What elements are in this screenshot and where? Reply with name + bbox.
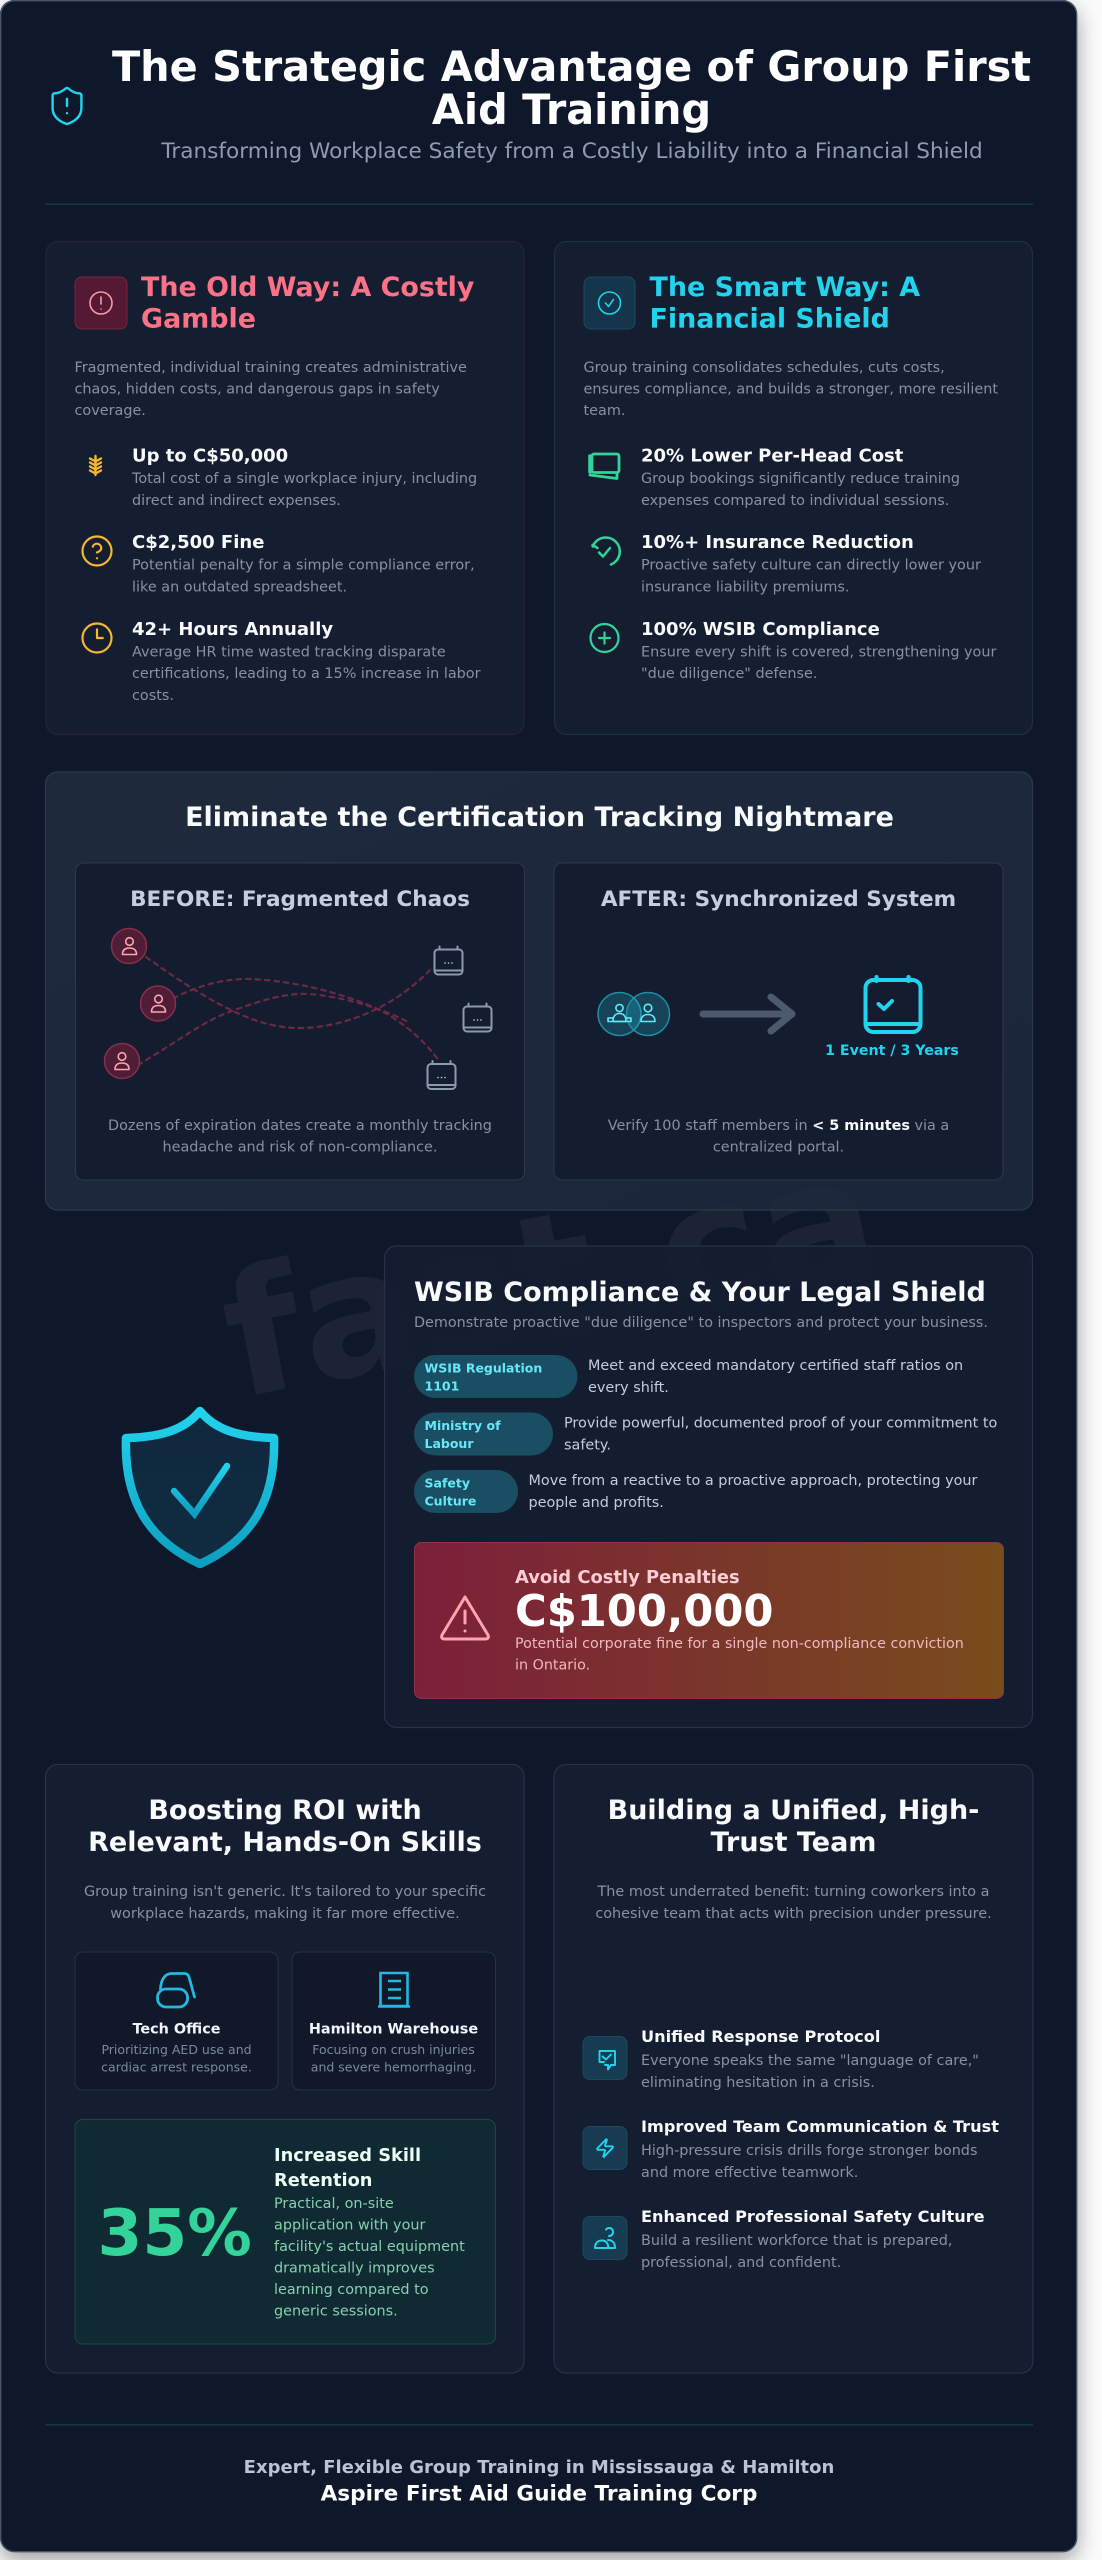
panel: the smart way bbox=[554, 242, 1032, 734]
row: regulation: 1101 bbox=[424, 1378, 459, 1394]
item: WSIB compliance: "due diligence" defense. bbox=[641, 666, 817, 682]
heading bbox=[88, 1795, 482, 1858]
caption: Dozens of expiration dates create a monthly tracking bbox=[108, 1118, 492, 1134]
icon: question bbox=[82, 536, 112, 566]
panel: boosting ROI bbox=[46, 1764, 524, 2373]
item: WSIB compliance bbox=[590, 619, 996, 682]
item: response protocol: Unified Response Protocol bbox=[641, 2027, 880, 2046]
item: hours: certifications, leading to a 15% increase in labor bbox=[132, 666, 481, 682]
synchronized diagram bbox=[598, 977, 959, 1059]
stat title: Increased Skill bbox=[274, 2145, 421, 2166]
card: tech office bbox=[75, 1952, 278, 2090]
row: safety culture bbox=[414, 1470, 978, 1513]
row: safety culture: Culture bbox=[424, 1494, 476, 1508]
row: ministry bbox=[414, 1412, 997, 1456]
item: safety culture: Enhanced Professional Safety Culture bbox=[641, 2207, 985, 2226]
title: Aid Training bbox=[432, 86, 711, 134]
card: hamilton warehouse: and severe hemorrhaging. bbox=[311, 2060, 476, 2074]
big number: 35% bbox=[98, 2196, 252, 2271]
icon: people bbox=[583, 2216, 627, 2260]
item: hours bbox=[82, 619, 481, 704]
heading: Gamble bbox=[141, 304, 256, 334]
card: hamilton warehouse: Focusing on crush injuries bbox=[312, 2042, 475, 2057]
panel: certification tracking bbox=[46, 772, 1032, 1210]
item: WSIB compliance: 100% WSIB Compliance bbox=[641, 619, 880, 640]
group of people bbox=[598, 992, 670, 1036]
heading: Financial Shield bbox=[650, 304, 890, 334]
row: ministry: Labour bbox=[424, 1436, 474, 1451]
row: regulation: Meet and exceed mandatory certified staff ratios on bbox=[588, 1358, 963, 1374]
item: team communication: Improved Team Communication & Trust bbox=[641, 2117, 999, 2136]
intro text bbox=[74, 360, 467, 419]
item: fine bbox=[82, 532, 475, 596]
footer: Aspire First Aid Guide Training Corp bbox=[321, 2482, 757, 2506]
caption: centralized portal. bbox=[713, 1140, 844, 1156]
footer bbox=[244, 2457, 834, 2506]
item: injury cost: direct and indirect expenses. bbox=[132, 493, 341, 509]
callout text bbox=[515, 1636, 964, 1674]
heading: Trust Team bbox=[711, 1827, 876, 1858]
stat text: Practical, on-site bbox=[274, 2196, 394, 2212]
arrow bbox=[703, 997, 792, 1031]
caption: headache and risk of non-compliance. bbox=[162, 1140, 438, 1156]
row: safety culture: Move from a reactive to a proactive approach, protecting your bbox=[528, 1473, 978, 1489]
title bbox=[112, 43, 1031, 134]
caption: Verify 100 staff members in < 5 minutes via a bbox=[608, 1118, 949, 1134]
card: tech office: Tech Office bbox=[132, 2022, 221, 2038]
item: insurance reduction: insurance liability premiums. bbox=[641, 580, 849, 596]
heading: Eliminate the Certification Tracking Nightmare bbox=[185, 802, 894, 833]
person 2 bbox=[140, 986, 176, 1021]
item: fine: Potential penalty for a simple compliance error, bbox=[132, 558, 475, 574]
item: team communication: High-pressure crisis drills forge stronger bonds bbox=[641, 2143, 977, 2159]
intro text: team. bbox=[584, 403, 625, 419]
row: ministry: Ministry of bbox=[424, 1418, 501, 1433]
item: safety culture: professional, and confident. bbox=[641, 2255, 841, 2271]
item: injury cost bbox=[90, 446, 477, 509]
stat text: learning compared to bbox=[274, 2282, 429, 2298]
heading: The Old Way: A Costly bbox=[141, 272, 475, 303]
icon: wheat bbox=[90, 456, 101, 475]
icon: gauge check bbox=[592, 538, 620, 564]
stat title bbox=[274, 2145, 421, 2191]
stat: skill retention bbox=[75, 2120, 496, 2344]
heading: AFTER: Synchronized System bbox=[601, 887, 956, 912]
chaos diagram bbox=[104, 928, 492, 1089]
item: response protocol: Everyone speaks the same "language of care," bbox=[641, 2053, 979, 2069]
intro text: coverage. bbox=[74, 403, 146, 419]
title: The Strategic Advantage of Group First bbox=[112, 43, 1031, 91]
intro text: The most underrated benefit: turning coworkers into a bbox=[596, 1884, 990, 1900]
subtitle: Transforming Workplace Safety from a Costly Liability into a Financial Shield bbox=[160, 139, 983, 164]
row: regulation: WSIB Regulation bbox=[424, 1360, 542, 1376]
item: injury cost: Up to C$50,000 bbox=[132, 446, 288, 466]
row: safety culture: Safety bbox=[424, 1476, 470, 1490]
intro text bbox=[84, 1884, 486, 1922]
item: insurance reduction: 10%+ Insurance Reduction bbox=[641, 532, 914, 553]
card: hamilton warehouse bbox=[292, 1952, 496, 2090]
callout label: Avoid Costly Penalties bbox=[515, 1567, 740, 1588]
heading bbox=[650, 272, 920, 334]
heading: Building a Unified, High- bbox=[608, 1795, 979, 1826]
icon: warehouse document bbox=[378, 1973, 410, 2006]
person 3 bbox=[104, 1044, 140, 1078]
item: hours: Average HR time wasted tracking disparate bbox=[132, 644, 446, 660]
calendar 2 bbox=[464, 1004, 492, 1032]
item: safety culture: Build a resilient workforce that is prepared, bbox=[641, 2233, 952, 2249]
icon: clock bbox=[82, 624, 112, 652]
item: fine: like an outdated spreadsheet. bbox=[132, 580, 347, 596]
row: regulation: every shift. bbox=[588, 1380, 669, 1396]
icon: screen bbox=[590, 454, 619, 478]
callout text: in Ontario. bbox=[515, 1658, 590, 1674]
connection lines bbox=[138, 957, 440, 1065]
callout amount: C$100,000 bbox=[515, 1587, 773, 1637]
intro text: ensures compliance, and builds a stronger, more resilient bbox=[584, 382, 998, 398]
item: WSIB compliance: Ensure every shift is covered, strengthening your bbox=[641, 644, 996, 660]
watermark: fast.ca bbox=[207, 1115, 893, 1438]
stat text: facility's actual equipment bbox=[274, 2239, 465, 2255]
panel: after bbox=[554, 863, 1003, 1180]
item: fine: C$2,500 Fine bbox=[132, 532, 264, 553]
calendar 3 bbox=[428, 1061, 456, 1089]
item: team communication: and more effective teamwork. bbox=[641, 2165, 858, 2181]
callout text: Potential corporate fine for a single non-compliance conviction bbox=[515, 1636, 964, 1652]
header bbox=[53, 43, 1031, 164]
item: per-head cost: expenses compared to individual sessions. bbox=[641, 493, 949, 509]
icon: alert circle bbox=[75, 277, 127, 329]
heading bbox=[608, 1795, 979, 1858]
icon: check circle bbox=[584, 277, 635, 329]
panel: before bbox=[76, 863, 524, 1180]
icon: tech office bbox=[158, 1974, 194, 2007]
intro text: cohesive team that acts with precision under pressure. bbox=[595, 1906, 992, 1922]
row: ministry: Provide powerful, documented proof of your commitment to bbox=[564, 1416, 997, 1432]
intro text: Group training consolidates schedules, cuts costs, bbox=[584, 360, 945, 376]
calendar 1 bbox=[434, 946, 462, 974]
item: per-head cost: Group bookings significantly reduce training bbox=[641, 471, 960, 487]
calendar check bbox=[866, 977, 920, 1032]
intro text bbox=[584, 360, 998, 419]
item: insurance reduction: Proactive safety culture can directly lower your bbox=[641, 558, 981, 574]
callout: penalties bbox=[414, 1542, 1004, 1698]
card: hamilton warehouse: Hamilton Warehouse bbox=[309, 2022, 478, 2038]
event label: 1 Event / 3 Years bbox=[825, 1043, 959, 1059]
item: hours: 42+ Hours Annually bbox=[132, 619, 333, 640]
intro text: Fragmented, individual training creates administrative bbox=[74, 360, 467, 376]
item: insurance reduction bbox=[592, 532, 981, 596]
heading: Relevant, Hands-On Skills bbox=[88, 1827, 482, 1858]
item: safety culture bbox=[583, 2207, 985, 2271]
row: safety culture: people and profits. bbox=[528, 1495, 664, 1511]
panel: the old way bbox=[46, 242, 524, 734]
footer: Expert, Flexible Group Training in Mississauga & Hamilton bbox=[244, 2457, 834, 2478]
card: tech office: cardiac arrest response. bbox=[101, 2060, 252, 2074]
item: team communication bbox=[583, 2117, 999, 2181]
stat text: generic sessions. bbox=[274, 2304, 398, 2320]
icon: plus circle bbox=[590, 624, 618, 652]
item: hours: costs. bbox=[132, 688, 174, 704]
stat text: application with your bbox=[274, 2218, 426, 2234]
icon: large shield bbox=[126, 1411, 274, 1564]
heading: The Smart Way: A bbox=[650, 272, 920, 303]
item: per-head cost: 20% Lower Per-Head Cost bbox=[641, 446, 904, 466]
intro text: chaos, hidden costs, and dangerous gaps in safety bbox=[74, 382, 440, 398]
stat text: dramatically improves bbox=[274, 2260, 435, 2276]
row: ministry: safety. bbox=[564, 1438, 611, 1454]
item: injury cost: Total cost of a single workplace injury, including bbox=[131, 471, 477, 487]
card: tech office: Prioritizing AED use and bbox=[101, 2042, 252, 2057]
icon: warning triangle bbox=[442, 1597, 488, 1639]
person 1 bbox=[112, 928, 146, 964]
item: response protocol: eliminating hesitation in a crisis. bbox=[641, 2075, 875, 2091]
panel: WSIB compliance bbox=[384, 1246, 1032, 1728]
caption bbox=[108, 1118, 492, 1156]
icon: chat check bbox=[583, 2036, 627, 2080]
heading: BEFORE: Fragmented Chaos bbox=[130, 887, 470, 912]
intro text bbox=[595, 1884, 992, 1922]
heading: WSIB Compliance & Your Legal Shield bbox=[414, 1277, 986, 1308]
intro text: Group training isn't generic. It's tailored to your specific bbox=[84, 1884, 486, 1900]
item: response protocol bbox=[583, 2027, 979, 2091]
icon: shield alert bbox=[53, 88, 81, 124]
row: regulation bbox=[414, 1355, 963, 1398]
heading bbox=[141, 272, 475, 334]
item: per-head cost bbox=[590, 446, 960, 509]
icon: lightning bbox=[583, 2126, 627, 2170]
caption bbox=[608, 1118, 949, 1156]
intro text: workplace hazards, making it far more effective. bbox=[110, 1906, 460, 1922]
stat title: Retention bbox=[274, 2170, 372, 2191]
heading: Boosting ROI with bbox=[148, 1795, 422, 1826]
sub text: Demonstrate proactive "due diligence" to inspectors and protect your business. bbox=[414, 1315, 988, 1331]
stat text bbox=[274, 2196, 465, 2320]
panel: unified team bbox=[554, 1764, 1033, 2373]
